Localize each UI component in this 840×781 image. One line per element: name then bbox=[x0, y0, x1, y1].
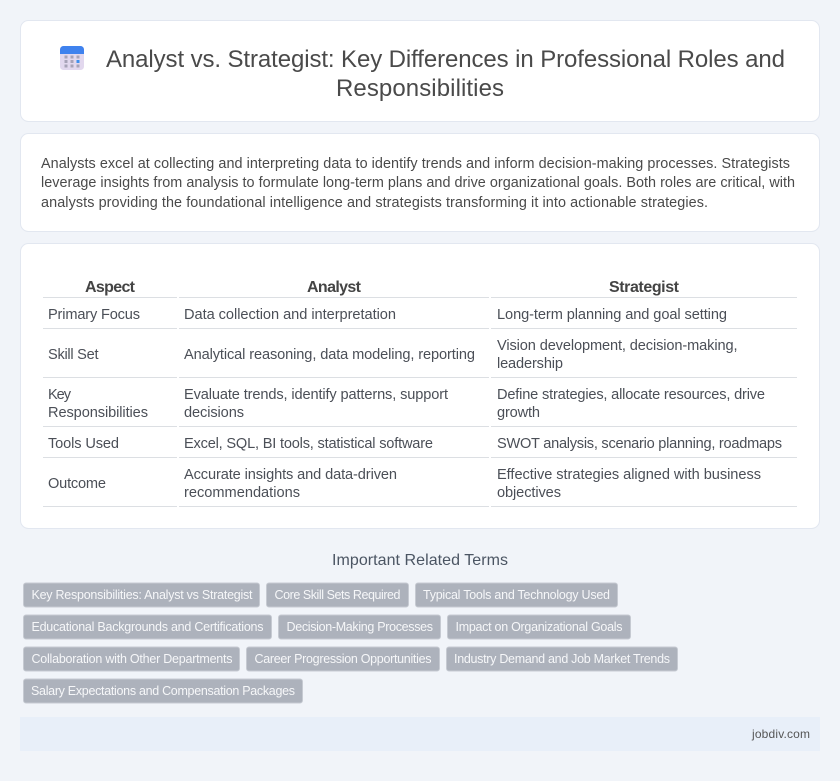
tag bbox=[24, 615, 272, 639]
row: outcome: objectives bbox=[497, 485, 561, 501]
tag: Decision-Making Processes bbox=[286, 620, 433, 634]
row: key responsibilities: Define strategies, allocate resources, drive bbox=[497, 387, 765, 403]
tag bbox=[24, 647, 240, 671]
heading: important related terms: Important Related Terms bbox=[332, 552, 508, 569]
tag: Industry Demand and Job Market Trends bbox=[454, 652, 670, 666]
row: outcome: Effective strategies aligned with business bbox=[497, 467, 761, 483]
row: outcome bbox=[48, 467, 761, 501]
tag bbox=[446, 647, 678, 671]
related term tags bbox=[24, 583, 678, 703]
row: outcome: recommendations bbox=[184, 485, 300, 501]
row: tools used: Tools Used bbox=[48, 436, 119, 452]
tag bbox=[24, 679, 302, 703]
table header: Aspect bbox=[85, 279, 136, 296]
title: Responsibilities bbox=[336, 75, 504, 102]
row: key responsibilities: Responsibilities bbox=[48, 405, 148, 421]
row: outcome: Outcome bbox=[48, 476, 106, 492]
row: tools used: SWOT analysis, scenario planning, roadmaps bbox=[497, 436, 782, 452]
panel: comparison table bbox=[20, 244, 820, 528]
text block: introduction: Analysts excel at collecting and interpreting data to identify trends and inform decision-making processes. Strategists bbox=[41, 156, 790, 172]
row: skill set: Vision development, decision-making, bbox=[497, 338, 738, 354]
tag: Salary Expectations and Compensation Packages bbox=[31, 684, 295, 698]
table header bbox=[85, 279, 680, 296]
panel: introduction bbox=[20, 134, 820, 232]
table header: Analyst bbox=[307, 279, 362, 296]
tag: Typical Tools and Technology Used bbox=[423, 588, 610, 602]
row: key responsibilities: Key bbox=[48, 387, 72, 403]
tag bbox=[266, 583, 408, 607]
row: key responsibilities: growth bbox=[497, 405, 540, 421]
row: skill set: Skill Set bbox=[48, 347, 98, 363]
row: primary focus: Long-term planning and goal setting bbox=[497, 307, 727, 323]
row: skill set bbox=[48, 338, 738, 372]
table header: Strategist bbox=[609, 279, 680, 296]
tag: Educational Backgrounds and Certifications bbox=[32, 620, 264, 634]
icon: calendar bbox=[60, 46, 84, 70]
tag: Career Progression Opportunities bbox=[254, 652, 432, 666]
tag bbox=[278, 615, 440, 639]
tag: Key Responsibilities: Analyst vs Strategist bbox=[32, 588, 253, 602]
row: skill set: leadership bbox=[497, 356, 563, 372]
panel: header bbox=[20, 20, 820, 122]
row: outcome: Accurate insights and data-driven bbox=[184, 467, 397, 483]
row: key responsibilities: decisions bbox=[184, 405, 244, 421]
row: primary focus: Primary Focus bbox=[48, 307, 140, 323]
text block: introduction: leverage insights from analysis to formulate long-term plans and drive organizational goals. Both roles are critical, with bbox=[41, 175, 795, 191]
tag bbox=[448, 615, 630, 639]
row: key responsibilities: Evaluate trends, identify patterns, support bbox=[184, 387, 448, 403]
row: primary focus: Data collection and interpretation bbox=[184, 307, 396, 323]
footer: jobdiv.com bbox=[751, 727, 810, 741]
row: tools used bbox=[48, 436, 782, 452]
tag: Collaboration with Other Departments bbox=[32, 652, 232, 666]
title: Analyst vs. Strategist: Key Differences in Professional Roles and bbox=[106, 46, 785, 73]
row: key responsibilities bbox=[48, 387, 765, 421]
text block: introduction bbox=[41, 156, 795, 211]
row: primary focus bbox=[48, 307, 727, 323]
tag: Impact on Organizational Goals bbox=[456, 620, 622, 634]
tag: Core Skill Sets Required bbox=[274, 588, 401, 602]
row: tools used: Excel, SQL, BI tools, statistical software bbox=[184, 436, 433, 452]
row: skill set: Analytical reasoning, data modeling, reporting bbox=[184, 347, 475, 363]
footer bbox=[20, 717, 820, 751]
title bbox=[106, 46, 785, 102]
tag bbox=[24, 583, 260, 607]
tag bbox=[416, 583, 618, 607]
tag bbox=[246, 647, 440, 671]
text block: introduction: analysts providing the foundational intelligence and strategists transforming it into actionable strategies. bbox=[41, 195, 708, 211]
